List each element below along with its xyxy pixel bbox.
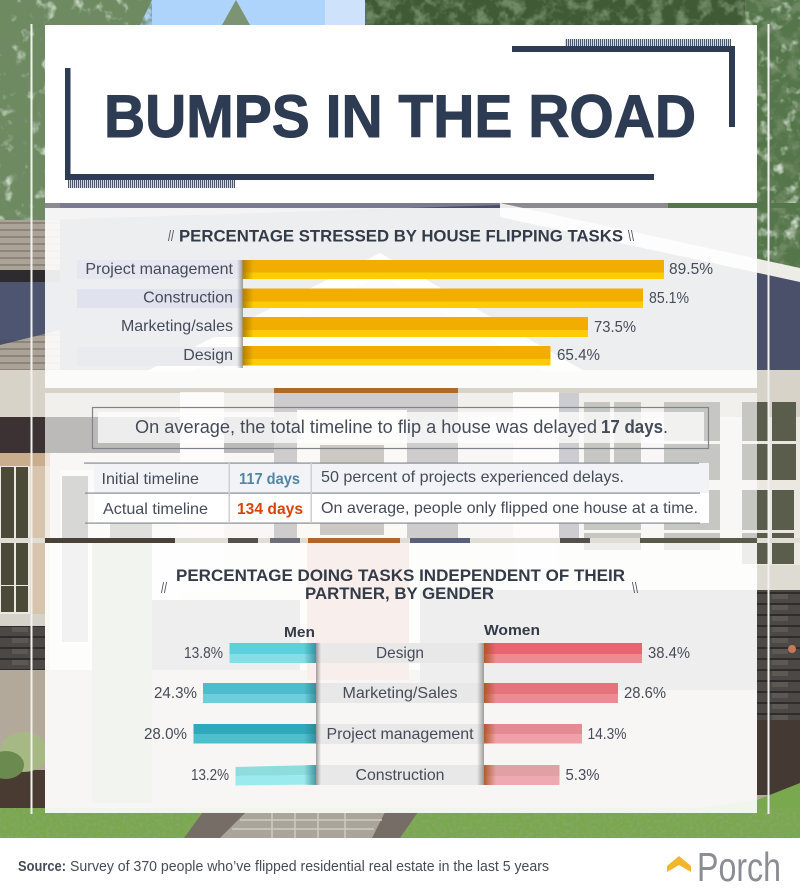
row: construction: 13.2% [191,767,229,784]
bar: project management: 89.5% [669,261,713,278]
title frame: upper right bracket [512,39,735,127]
logo: Porch [667,844,781,890]
row: design: 13.8% [184,645,223,662]
row: initial timeline: 117 days [239,471,300,488]
row: design: Design [376,645,424,662]
row: marketing/sales: 24.3% [154,685,197,702]
row: construction: Construction [356,767,444,784]
row: marketing/sales: 28.6% [624,685,666,702]
heading: PERCENTAGE DOING TASKS INDEPENDENT OF THEIR [176,566,625,585]
source note: Survey of 370 people who’ve flipped residential real estate in the last 5 years [70,859,549,875]
white vertical rule right [768,24,770,814]
heading [161,566,639,603]
panel: tasks by gender [45,543,757,813]
grass and pavers [0,808,800,838]
heading: PARTNER, BY GENDER [305,584,494,603]
row: construction: 5.3% [566,767,600,784]
callout: total delay: . [663,417,668,437]
table: timelines [84,462,709,524]
bar: design: Design [183,347,233,364]
row: initial timeline [102,469,624,488]
band beneath table [0,538,800,543]
title: BUMPS IN THE ROAD [104,83,696,150]
bar chart: stress by task [77,260,713,368]
white vertical rule left [30,24,32,814]
callout: total delay: On average, the total timeline to flip a house was delayed [135,417,597,437]
row: initial timeline: Initial timeline [102,471,199,488]
callout: total delay: 17 days [601,417,663,437]
row: actual timeline: Actual timeline [103,501,208,518]
heading: \\ [632,580,639,597]
bar: marketing/sales: 73.5% [594,319,636,336]
row: marketing/sales: Marketing/Sales [342,685,458,702]
left window [1,467,28,612]
panel: timeline wash [45,393,757,538]
panel: title [45,25,757,203]
heading: \\ [628,228,635,245]
row: project management [144,724,626,744]
source note: Source: [18,859,66,875]
bar: construction: 85.1% [649,290,689,307]
bar: design: 65.4% [557,347,600,364]
legend label: men: Men [284,624,315,641]
shrub and mulch [0,770,45,812]
row: construction [191,765,600,786]
panel: percentage stressed by tasks [45,208,757,388]
footer [0,838,800,895]
bar: marketing/sales: Marketing/sales [121,318,233,335]
bar: construction: Construction [143,290,233,306]
bar: marketing/sales [121,317,636,337]
diverging bar chart [144,643,690,786]
row: project management: 28.0% [144,726,187,743]
heading: PERCENTAGE STRESSED BY HOUSE FLIPPING TASKS [179,226,623,246]
bar: project management [85,260,713,279]
title frame: lower left bracket [65,68,654,188]
right windows [584,402,796,564]
bar: design [183,346,600,366]
heading: // [168,228,175,245]
bar: project management: Project management [85,261,234,278]
row: initial timeline: 50 percent of projects experienced delays. [321,469,624,486]
callout: total delay [92,408,708,448]
legend label: women: Women [484,622,540,639]
row: actual timeline: 134 days [237,501,303,518]
heading: // [161,580,168,597]
row: actual timeline [103,500,698,518]
row: design: 38.4% [648,645,690,662]
row: project management: 14.3% [588,726,626,743]
row: actual timeline: On average, people only flipped one house at a time. [321,500,698,517]
row: project management: Project management [326,726,474,743]
bar: construction [143,288,689,308]
row: marketing/sales [154,683,666,703]
row: design [184,643,690,663]
